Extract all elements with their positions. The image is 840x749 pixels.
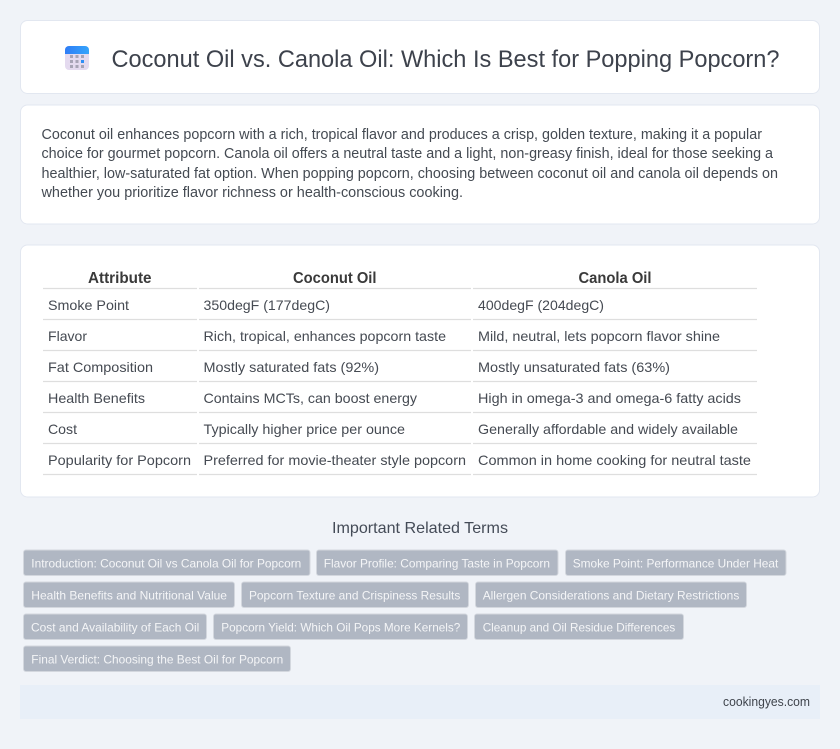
row: smoke point: 350degF (177degC) [204, 297, 330, 313]
panel: comparison table [20, 245, 820, 497]
tag: Smoke Point: Performance Under Heat [573, 556, 779, 570]
row: smoke point [48, 297, 604, 313]
tag [566, 550, 786, 576]
row: popularity for popcorn [48, 452, 751, 468]
row: health benefits: Health Benefits [48, 390, 145, 406]
table header [88, 270, 652, 287]
tag: Flavor Profile: Comparing Taste in Popcorn [324, 556, 550, 570]
row: flavor: Rich, tropical, enhances popcorn taste [204, 328, 446, 344]
row: health benefits: High in omega-3 and omega-6 fatty acids [478, 390, 741, 406]
row: popularity for popcorn: Preferred for movie-theater style popcorn [204, 452, 466, 468]
row: health benefits: Contains MCTs, can boost energy [204, 390, 417, 406]
table header: Attribute [88, 270, 152, 287]
row: fat composition [48, 359, 670, 375]
row: flavor: Mild, neutral, lets popcorn flavor shine [478, 328, 720, 344]
row: popularity for popcorn: Popularity for Popcorn [48, 452, 191, 468]
row: flavor [48, 328, 720, 344]
tag: Introduction: Coconut Oil vs Canola Oil for Popcorn [31, 556, 301, 570]
row: cost: Typically higher price per ounce [204, 421, 405, 437]
row: smoke point: Smoke Point [48, 297, 129, 313]
table header: Canola Oil [578, 270, 652, 287]
row: cost: Generally affordable and widely available [478, 421, 738, 437]
tag: Health Benefits and Nutritional Value [31, 588, 227, 602]
tag [24, 550, 310, 576]
row: popularity for popcorn: Common in home cooking for neutral taste [478, 452, 751, 468]
row: flavor: Flavor [48, 328, 87, 344]
panel: introduction paragraph: healthier, low-saturated fat option. When popping popcorn, choosing between coconut oil and canola oil depends on [42, 166, 778, 182]
table header: Coconut Oil [293, 270, 376, 287]
row: cost: Cost [48, 421, 77, 437]
title card [20, 20, 820, 94]
heading: important related terms: Important Related Terms [332, 520, 508, 537]
panel: introduction paragraph: Coconut oil enhances popcorn with a rich, tropical flavor and produces a crisp, golden texture, making it a popular [42, 127, 762, 143]
tag [24, 646, 290, 672]
tag [242, 582, 468, 608]
tag: Final Verdict: Choosing the Best Oil for Popcorn [31, 652, 283, 666]
row: smoke point: 400degF (204degC) [478, 297, 604, 313]
row: fat composition: Fat Composition [48, 359, 153, 375]
footer bar [20, 685, 820, 719]
related terms tags [24, 550, 786, 672]
tag [214, 614, 468, 640]
tag: Allergen Considerations and Dietary Restrictions [483, 588, 739, 602]
panel: introduction paragraph: whether you prioritize flavor richness or health-conscious cooking. [41, 185, 463, 201]
footer source text: cookingyes.com [723, 695, 810, 709]
row: cost [48, 421, 738, 437]
tag [316, 550, 558, 576]
tag [476, 582, 746, 608]
tag: Cost and Availability of Each Oil [31, 620, 199, 634]
row: health benefits [48, 390, 741, 406]
tag [24, 614, 206, 640]
panel: introduction paragraph [20, 105, 820, 224]
title: Coconut Oil vs. Canola Oil: Which Is Best for Popping Popcorn? [112, 46, 780, 73]
tag: Popcorn Yield: Which Oil Pops More Kernels? [221, 620, 461, 634]
tag: Popcorn Texture and Crispiness Results [249, 588, 460, 602]
tag [24, 582, 234, 608]
tag: Cleanup and Oil Residue Differences [483, 620, 675, 634]
icon: calendar [65, 46, 89, 70]
row: fat composition: Mostly unsaturated fats (63%) [478, 359, 670, 375]
row: fat composition: Mostly saturated fats (92%) [204, 359, 379, 375]
tag [474, 614, 684, 640]
panel: introduction paragraph: choice for gourmet popcorn. Canola oil offers a neutral taste and a light, non-greasy finish, ideal for those seeking a [42, 146, 774, 162]
